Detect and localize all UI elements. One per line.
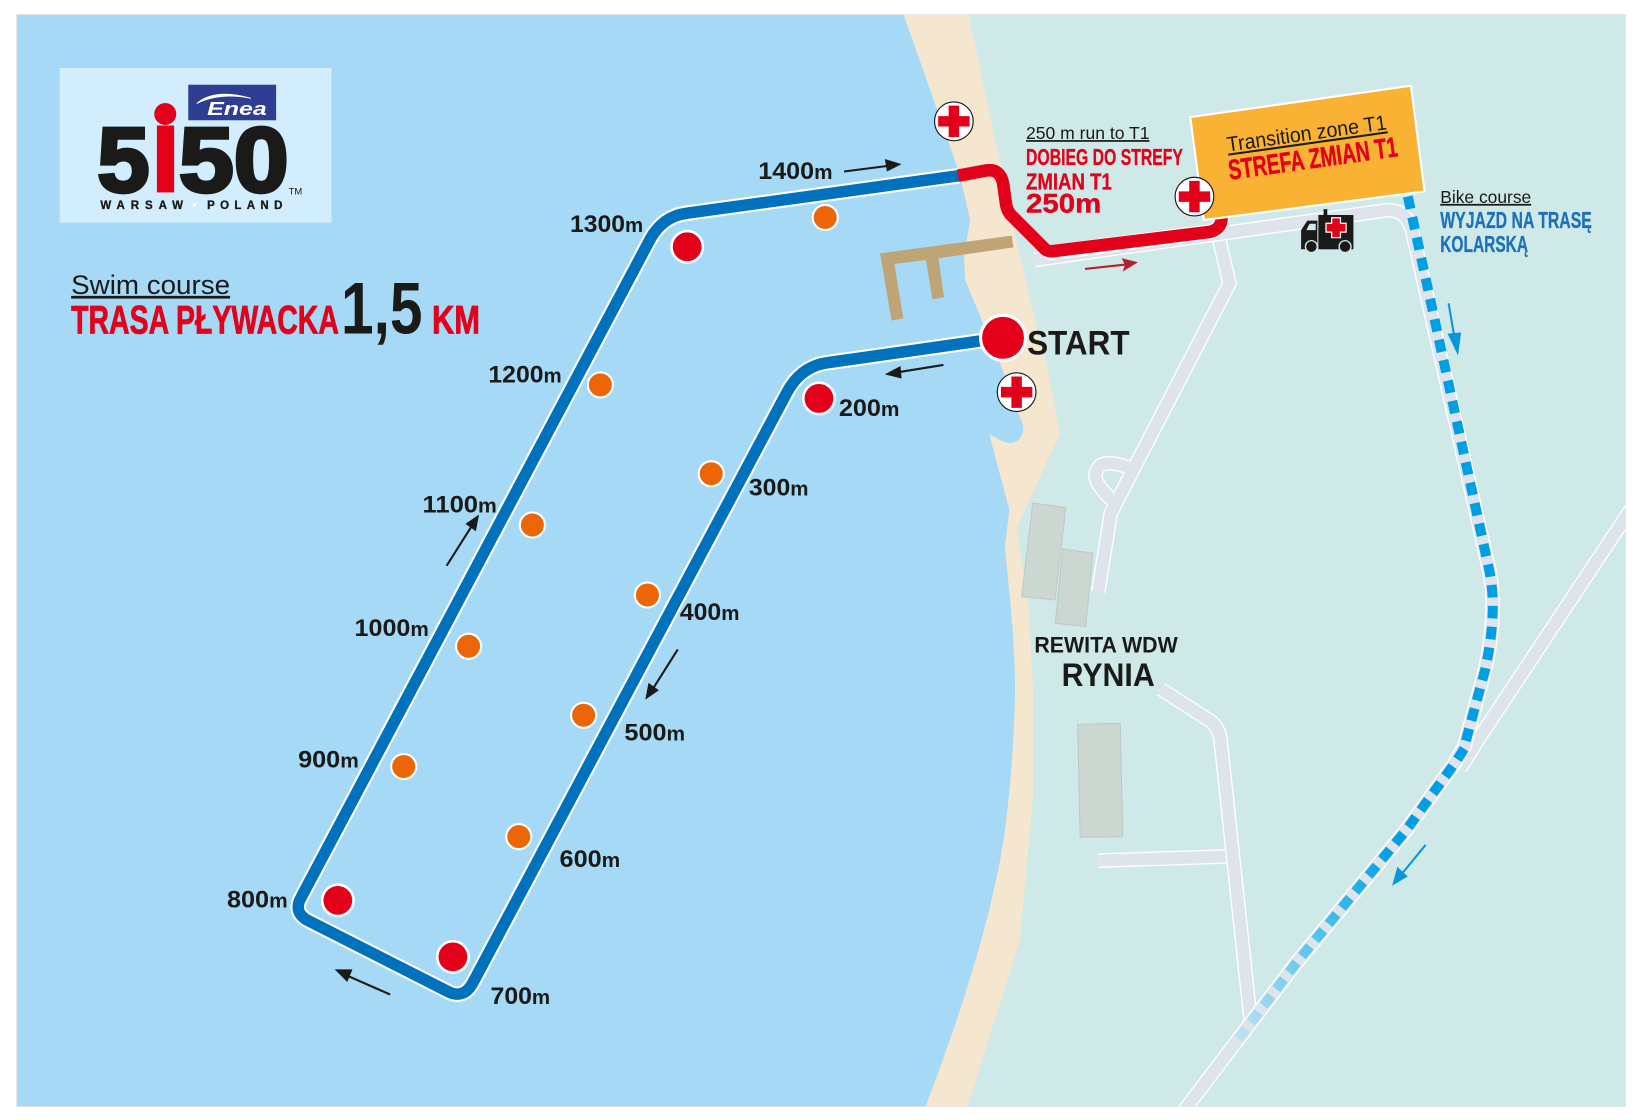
- distance labels: 1400m: [758, 158, 833, 185]
- logo: tagline: [100, 200, 282, 212]
- start marker: [981, 315, 1026, 360]
- panel: transition zone T1: [1190, 86, 1425, 220]
- distance labels: 1100m: [423, 491, 497, 518]
- label: transition zone: [1223, 110, 1399, 186]
- logo: 5i50: 50: [179, 108, 289, 211]
- heading: swim course: KM: [432, 299, 480, 343]
- logo: 5i50: [97, 103, 302, 211]
- distance labels: 700m: [491, 983, 550, 1010]
- text: venue: RYNIA: [1062, 657, 1155, 693]
- text: run to T1: 250m: [1026, 188, 1101, 218]
- heading: swim course: 1,5: [341, 268, 423, 350]
- distance labels: 500m: [624, 719, 685, 746]
- start label: START: [1027, 325, 1130, 363]
- distance labels: 800m: [227, 887, 288, 914]
- text: bike course: Bike course: [1440, 187, 1531, 207]
- buildings: [1022, 503, 1123, 837]
- red turn buoys: [322, 231, 835, 973]
- roads: [1034, 210, 1637, 1115]
- orange buoys: [391, 205, 838, 849]
- run to T1 line: [958, 170, 1222, 253]
- icon: first aid beach south: [997, 373, 1036, 412]
- bike course dashed line: [1236, 197, 1493, 1042]
- panel: beach: [904, 15, 1060, 1106]
- distance labels: 200m: [839, 395, 899, 422]
- text: bike course: [1440, 187, 1592, 257]
- panel: logo: [60, 68, 332, 223]
- text: run to T1: ZMIAN T1: [1026, 168, 1112, 194]
- heading: swim course: [71, 268, 480, 350]
- logo: tagline: POLAND: [207, 200, 282, 212]
- distance labels: 300m: [749, 475, 808, 502]
- text: venue: REWITA WDW: [1034, 633, 1178, 658]
- arrows: swim direction: [335, 159, 943, 995]
- icon: first aid transition: [1175, 177, 1214, 216]
- label: transition zone: STREFA ZMIAN T1: [1226, 130, 1399, 186]
- heading: swim course: Swim course: [71, 269, 230, 300]
- logo: Enea badge: Enea: [207, 98, 267, 119]
- text: run to T1: [1026, 123, 1183, 218]
- arrow: run direction: [1085, 258, 1138, 272]
- logo: Enea badge: [188, 85, 276, 120]
- text: run to T1: 250 m run to T1: [1026, 123, 1149, 143]
- panel: land area: [952, 15, 1625, 1106]
- text: bike course: KOLARSKĄ: [1440, 231, 1528, 257]
- distance labels: 1300m: [570, 211, 643, 238]
- label: transition zone: Transition zone T1: [1225, 111, 1388, 157]
- text: venue: [1034, 633, 1178, 693]
- text: run to T1: DOBIEG DO STREFY: [1026, 144, 1183, 170]
- heading: swim course: TRASA PŁYWACKA: [71, 299, 339, 343]
- distance labels: [227, 158, 899, 1010]
- logo: 5i50: 5: [97, 108, 150, 211]
- icon: ambulance: [1301, 209, 1353, 253]
- icon: first aid beach north: [935, 102, 973, 141]
- distance labels: 400m: [680, 599, 739, 626]
- distance labels: 1200m: [488, 362, 562, 389]
- distance labels: 600m: [560, 846, 620, 873]
- pier: [880, 236, 1013, 321]
- logo: 5i50: TM: [289, 186, 302, 197]
- logo: tagline: WARSAW: [100, 200, 183, 212]
- swim course line: [298, 176, 1002, 994]
- distance labels: 1000m: [355, 615, 429, 642]
- distance labels: 900m: [298, 747, 359, 774]
- arrows: bike direction: [1392, 303, 1461, 886]
